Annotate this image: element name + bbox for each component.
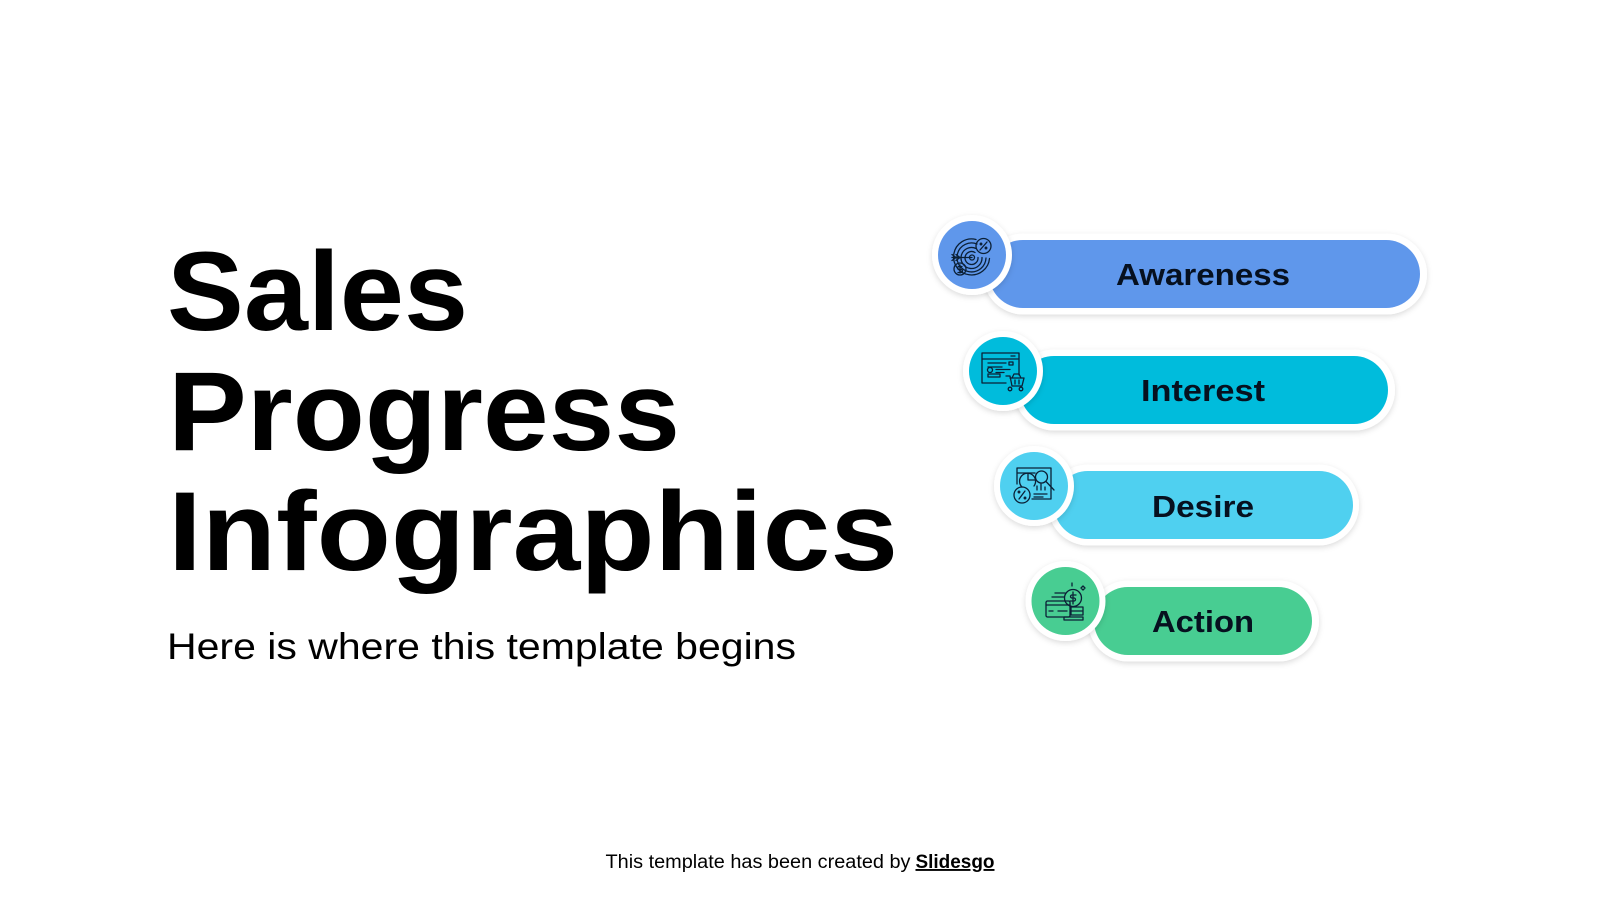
icon: target with percent and dollar	[932, 215, 1012, 295]
icon: credit card and coins	[1026, 561, 1106, 641]
pill: Action	[1088, 580, 1319, 662]
funnel step: Action	[1026, 561, 1319, 662]
label: Interest: Interest	[1141, 373, 1265, 408]
icon: analytics page with magnifier	[994, 446, 1074, 526]
funnel step: Desire	[994, 446, 1359, 546]
title: Infographics	[168, 469, 898, 594]
funnel step: Interest	[963, 331, 1395, 430]
icon: web page with shopping cart	[963, 331, 1043, 411]
label: Awareness: Awareness	[1116, 257, 1290, 292]
footer credit: Slidesgo	[916, 852, 994, 873]
title	[167, 229, 898, 594]
pill: Interest	[1014, 350, 1395, 430]
label: Action: Action	[1152, 604, 1254, 639]
funnel step: Awareness	[932, 215, 1427, 314]
pill: Desire	[1048, 464, 1359, 546]
footer credit: This template has been created by	[606, 852, 911, 873]
pill: Awareness	[983, 234, 1427, 314]
label: Desire: Desire	[1152, 489, 1254, 524]
title: Sales	[167, 229, 468, 354]
subtitle: Here is where this template begins	[167, 626, 796, 667]
title: Progress	[168, 349, 680, 474]
